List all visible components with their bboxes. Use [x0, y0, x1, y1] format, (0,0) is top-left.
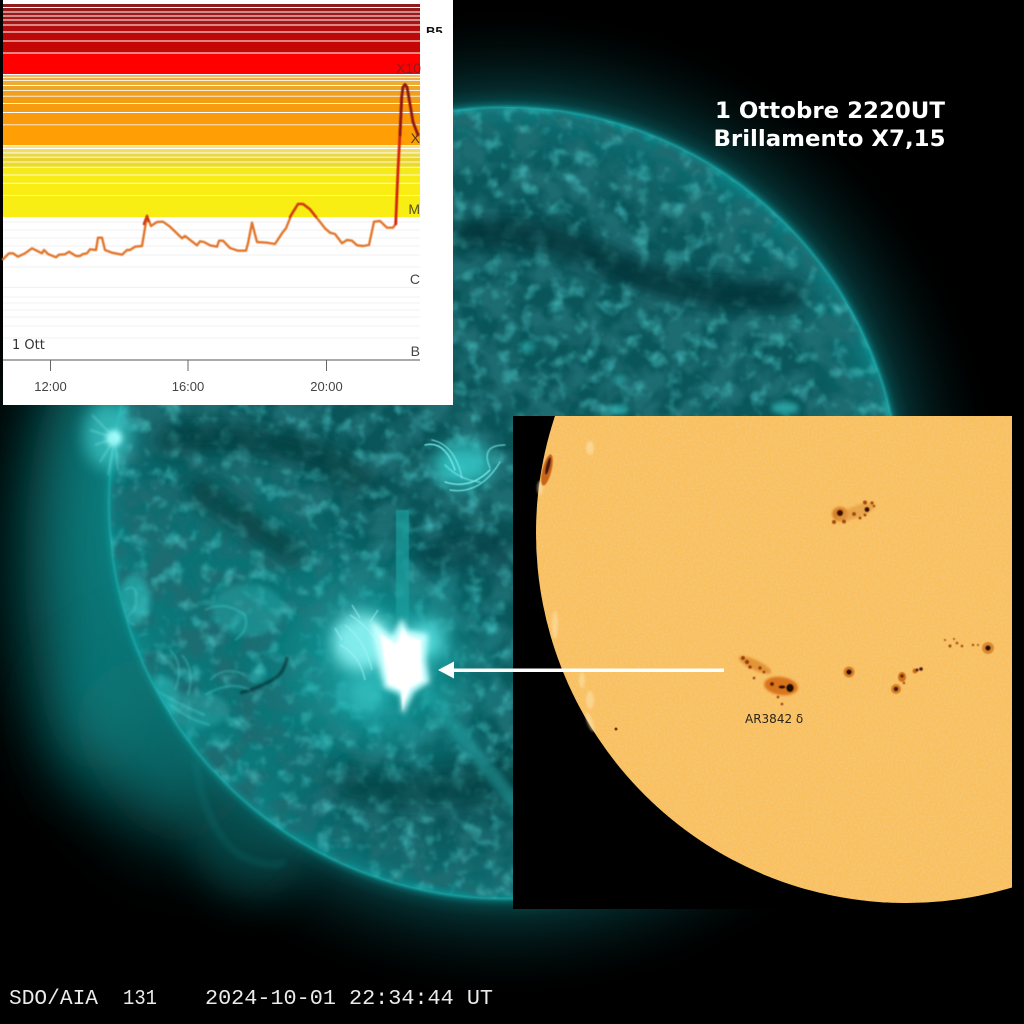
orange X band [3, 75, 420, 145]
eastern sunspot group [944, 638, 994, 654]
time axis labels: 16:00 [172, 379, 204, 394]
granulation grain overlay [513, 416, 1012, 909]
flare class labels: B [411, 343, 420, 359]
loops on south-east limb [125, 588, 250, 725]
bright limb fan near inset chart [84, 401, 132, 475]
solar flare core [332, 605, 446, 716]
flare class labels [396, 60, 421, 359]
GOES X-ray flux chart inset [3, 0, 453, 405]
title [714, 99, 946, 152]
northern sunspot group [832, 500, 877, 524]
red X10 band [3, 4, 420, 74]
dark filament channels [170, 233, 790, 790]
chart white background [3, 0, 453, 405]
teal solar disc SDO/AIA 131 [100, 100, 920, 910]
time axis labels [34, 379, 343, 394]
instrument and timestamp caption [9, 988, 493, 1011]
date label: 1 Ott [12, 338, 45, 353]
panel: SDO HMI continuum sunspot image [513, 416, 1012, 909]
faculae near limb [537, 441, 596, 732]
time axis line [3, 359, 420, 361]
small trailing spot [614, 728, 618, 730]
time axis labels: 20:00 [310, 379, 343, 394]
arrow from AR3842 to flare [438, 662, 724, 678]
isolated round sunspot [844, 666, 854, 678]
central-right sunspot group [891, 667, 923, 694]
dark filament in lower left [240, 657, 287, 693]
diagonal diffraction streak [425, 690, 520, 810]
time axis ticks [50, 360, 326, 371]
instrument and timestamp caption: 131 [123, 988, 157, 1011]
yellow solar disc [536, 416, 1012, 903]
limb brightening ring [109, 107, 901, 899]
yellow M band [3, 146, 420, 217]
bright diffuse patches in upper disc [119, 342, 864, 728]
title: Brillamento X7,15 [714, 127, 946, 152]
X-ray flux curve [3, 84, 418, 259]
flare class labels: X10 [396, 60, 421, 76]
limb sunspot [540, 454, 554, 486]
flare halo on disc [305, 585, 465, 745]
vertical CCD bleed streak [396, 510, 409, 640]
active region label: AR3842 δ [745, 712, 803, 726]
clipped B5 label: B5 [426, 24, 443, 39]
AR3842 sunspot group [737, 653, 799, 705]
flare class labels: M [408, 201, 420, 217]
lower-left brighter area of disc [127, 455, 356, 814]
title: 1 Ottobre 2220UT [715, 99, 945, 124]
time axis labels: 12:00 [34, 379, 67, 394]
flare class labels: X [411, 130, 421, 146]
flare class labels: C [410, 271, 420, 287]
mottled light coronal texture [100, 100, 920, 910]
instrument and timestamp caption: 2024-10-01 22:34:44 UT [205, 988, 493, 1011]
active region upper right of flare [425, 440, 505, 491]
instrument and timestamp caption: SDO/AIA [9, 988, 98, 1011]
faint C and B level grid lines [3, 222, 420, 338]
mottled dark coronal texture [100, 100, 920, 910]
